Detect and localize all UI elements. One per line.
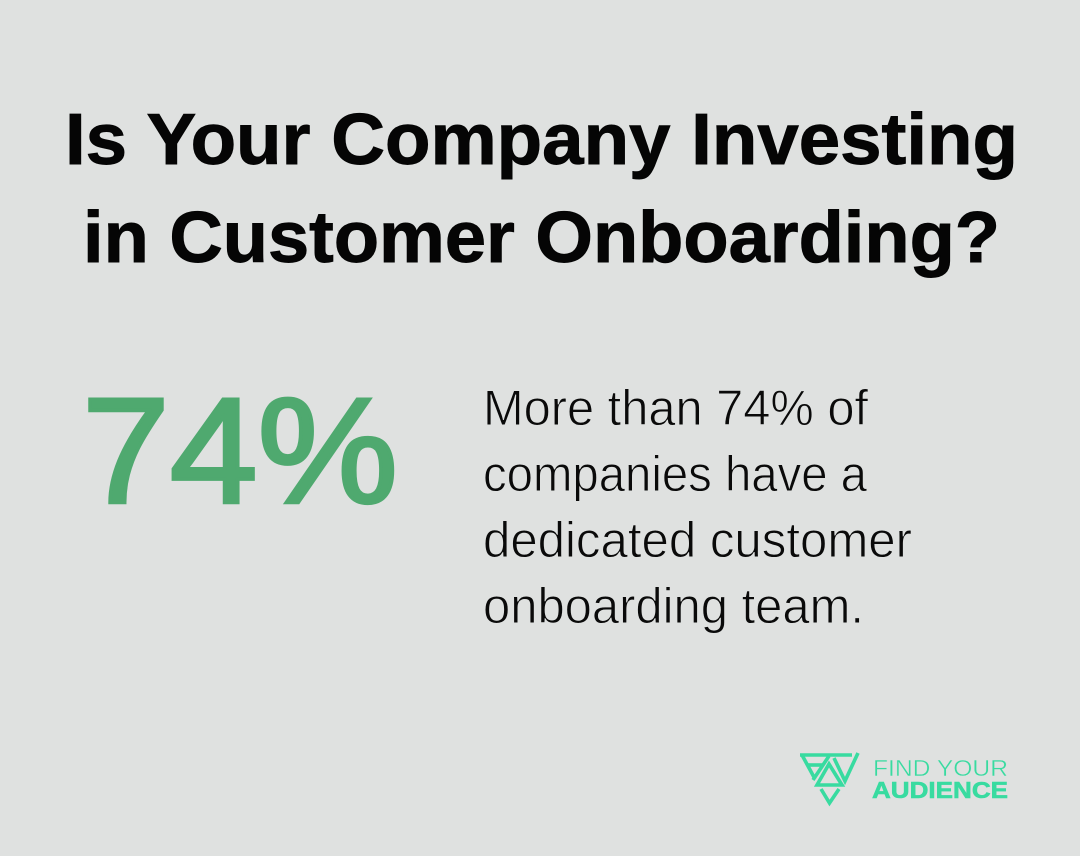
big statistic: 74%: 74% — [82, 366, 398, 534]
description text — [483, 380, 912, 634]
description text: dedicated customer — [483, 512, 912, 568]
logo wordmark: AUDIENCE — [872, 777, 1008, 803]
description text: companies have a — [483, 446, 867, 502]
title — [65, 100, 1018, 278]
description text: More than 74% of — [483, 380, 868, 436]
title: Is Your Company Investing — [65, 100, 1018, 180]
logo wordmark — [872, 755, 1008, 803]
icon: triangle logo mark — [800, 753, 858, 803]
logo: Find Your Audience — [800, 753, 1008, 803]
logo wordmark: FIND YOUR — [873, 755, 1008, 781]
description text: onboarding team. — [483, 578, 864, 634]
title: in Customer Onboarding? — [83, 198, 1000, 278]
